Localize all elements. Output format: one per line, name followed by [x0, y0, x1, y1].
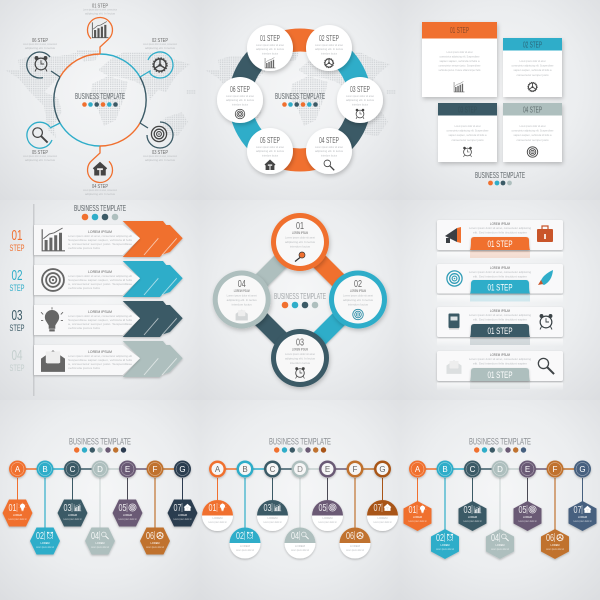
- row 02: vehicula purus felis: [68, 287, 101, 290]
- node C: Lorem ipsum dolor sit: [64, 518, 82, 521]
- panel: step buttons: [437, 220, 563, 390]
- node A: A: [215, 465, 221, 474]
- step 05: [23, 122, 60, 162]
- step 01: [83, 4, 117, 54]
- side rule: [33, 204, 34, 396]
- step circle 05: Lorem ipsum dolor sit amet: [256, 146, 284, 149]
- row 01: a, consectetur semper justo. Suspendisse: [68, 243, 133, 246]
- link line: [417, 468, 582, 470]
- node G: [168, 460, 198, 526]
- step circle 01: interdum luctus: [262, 52, 279, 56]
- step 03: Lorem ipsum dolor sit amet, consectetur: [143, 155, 177, 158]
- step circle 03: adipiscing elit. In lectus: [346, 99, 375, 102]
- node B: LOREM: [40, 542, 50, 545]
- node E: 05: [318, 503, 327, 514]
- link line: [217, 468, 382, 470]
- node D: Lorem ipsum dolor sit: [91, 546, 109, 549]
- heading: [74, 204, 126, 220]
- node E: Lorem ipsum dolor sit: [118, 518, 137, 521]
- panel: timeline circles: [202, 436, 398, 558]
- circle 02: LOREM IPSUM: [350, 289, 366, 293]
- step circle 05: [247, 128, 293, 174]
- node F: LOREM: [150, 542, 160, 545]
- node D: [85, 460, 115, 554]
- row 04: LOREM IPSUM: [88, 350, 112, 354]
- node A: Lorem ipsum dolor sit: [208, 521, 227, 524]
- node A: Lorem ipsum dolor sit: [8, 518, 27, 521]
- step circle 05: interdum luctus: [262, 154, 279, 158]
- row 03: STEP: [10, 323, 24, 333]
- step circle 01: [247, 25, 293, 71]
- circle 04: 04: [238, 279, 246, 290]
- node E: [112, 460, 142, 526]
- card 03: sapien sapien, vehicula id felis a: [448, 134, 487, 137]
- heading: [269, 436, 331, 453]
- node D: D: [297, 465, 303, 474]
- node F: [541, 460, 569, 559]
- step circle 03: 03 STEP: [350, 85, 370, 94]
- step 06: Lorem ipsum dolor sit amet, consectetur: [23, 43, 57, 46]
- row 1: Lorem ipsum dolor sit amet, consectetur adipiscing: [469, 227, 532, 230]
- heading: BUSINESS TEMPLATE: [74, 204, 126, 213]
- step 06: adipiscing elit. In lectus: [25, 47, 56, 50]
- node C: [458, 460, 486, 531]
- panel: six circle ring: [205, 25, 396, 174]
- node G: 07: [374, 503, 382, 514]
- node G: [367, 460, 398, 531]
- circle 03: LOREM IPSUM: [292, 348, 308, 352]
- row 2: elit. Sed interdum felis tincidunt sapien: [473, 276, 528, 278]
- node C: 03: [64, 503, 72, 514]
- heading: [469, 436, 531, 453]
- card 02: 02 STEP: [523, 40, 542, 50]
- step 02: [140, 38, 177, 78]
- panel: timeline hexagons vertical: [404, 436, 596, 559]
- card 01: 01 STEP: [450, 26, 469, 35]
- step 06: 06 STEP: [32, 38, 48, 44]
- node D: 04: [291, 531, 299, 542]
- row 3: Lorem ipsum dolor sit amet, consectetur adipiscing: [469, 314, 532, 317]
- node E: E: [325, 465, 330, 474]
- node G: LOREM: [178, 514, 187, 517]
- node B: 02: [36, 531, 44, 542]
- circle 01: [271, 213, 329, 271]
- row 03: [10, 301, 183, 337]
- step circle 03: interdum luctus: [352, 104, 369, 106]
- node G: Lorem ipsum dolor sit: [374, 521, 392, 524]
- card 04: [503, 103, 562, 162]
- card 02: [503, 38, 562, 97]
- node D: [486, 460, 514, 559]
- node C: Lorem ipsum dolor sit: [464, 520, 482, 523]
- step circle 01: adipiscing elit. In lectus: [256, 48, 285, 51]
- step 04: 04 STEP: [92, 184, 108, 190]
- step circle 02: interdum luctus: [321, 52, 338, 56]
- panel: line circle steps: [5, 4, 196, 196]
- heading: BUSINESS TEMPLATE: [75, 92, 125, 101]
- row 01: Suspendisse sapien sapien, vehicula id felis: [68, 239, 133, 242]
- circle 02: adipiscing elit. In lectus: [343, 299, 374, 302]
- step circle 06: Lorem ipsum dolor sit amet: [226, 95, 254, 98]
- node E: Lorem ipsum dolor sit: [318, 521, 337, 524]
- node A: LOREM: [212, 517, 222, 520]
- node A: [202, 460, 233, 531]
- step circle 02: Lorem ipsum dolor sit amet: [315, 44, 343, 47]
- card 04: sapien sapien, vehicula id felis a: [514, 134, 552, 137]
- row 2: LOREM IPSUM: [490, 266, 510, 270]
- row 2: 01 STEP: [488, 282, 512, 292]
- node B: B: [42, 465, 48, 474]
- panel: timeline hexagons horizontal: [2, 436, 198, 554]
- row 02: a, consectetur semper justo. Suspendisse: [68, 283, 133, 286]
- step circle 02: adipiscing elit. In lectus: [315, 48, 344, 51]
- step 02: Lorem ipsum dolor sit amet, consectetur: [143, 43, 177, 46]
- row 03: vehicula purus felis: [68, 327, 101, 330]
- heading: BUSINESS TEMPLATE: [269, 436, 331, 448]
- node G: LOREM: [578, 516, 587, 519]
- row 04: Lorem ipsum dolor sit amet, consectetur adipiscing elit: [68, 355, 132, 358]
- row 01: STEP: [10, 243, 24, 253]
- node B: Lorem ipsum dolor sit: [236, 549, 254, 552]
- node C: 03: [464, 505, 472, 516]
- card 01: Lorem ipsum dolor sit amet: [446, 51, 473, 54]
- node E: LOREM: [123, 514, 132, 517]
- node B: [30, 460, 60, 554]
- node G: G: [579, 465, 586, 474]
- node C: C: [70, 465, 76, 474]
- step 02: 02 STEP: [152, 38, 168, 44]
- row 03: Suspendisse sapien sapien, vehicula id felis: [68, 319, 133, 322]
- row 04: vehicula purus felis: [68, 367, 101, 370]
- step circle 05: adipiscing elit. In lectus: [256, 150, 285, 153]
- node E: 05: [118, 503, 127, 514]
- connector bars: [242, 242, 358, 358]
- node A: LOREM: [13, 514, 22, 517]
- node G: 07: [174, 503, 182, 514]
- card 02: consectetur semper justo: [516, 74, 549, 77]
- node A: 01: [8, 503, 17, 514]
- node B: 02: [236, 531, 244, 542]
- heading: [75, 92, 125, 107]
- node F: F: [153, 465, 158, 474]
- node D: D: [97, 465, 103, 474]
- node E: 05: [518, 505, 527, 516]
- node F: 06: [346, 531, 354, 542]
- node E: [514, 460, 542, 531]
- node D: Lorem ipsum dolor sit: [291, 549, 309, 552]
- step 01: 01 STEP: [92, 4, 108, 10]
- node G: G: [179, 465, 186, 474]
- node F: Lorem ipsum dolor sit: [346, 549, 364, 552]
- panel: arrow banners: [10, 204, 183, 396]
- row 01: LOREM IPSUM: [88, 230, 112, 234]
- step 05: 05 STEP: [32, 150, 48, 156]
- panel: four cards: [422, 22, 562, 185]
- node B: LOREM: [440, 544, 450, 547]
- node D: LOREM: [496, 544, 504, 547]
- node G: Lorem ipsum dolor sit: [574, 520, 592, 523]
- row 04: Suspendisse sapien sapien, vehicula id felis: [68, 359, 133, 362]
- card 03: consectetur adipiscing elit. Suspendisse: [446, 130, 489, 132]
- row 02: [10, 261, 183, 297]
- circle 04: interdum luctus: [232, 304, 253, 306]
- node C: C: [270, 465, 276, 474]
- card 01: consectetur adipiscing elit. Suspendisse: [440, 56, 480, 58]
- node B: B: [442, 465, 448, 474]
- node A: 01: [408, 505, 417, 516]
- card 04: consectetur adipiscing elit. Suspendisse: [512, 130, 554, 132]
- node E: Lorem ipsum dolor sit: [518, 520, 537, 523]
- circle 04: LOREM IPSUM: [234, 289, 250, 293]
- node F: F: [353, 465, 358, 474]
- row 1: [437, 220, 563, 260]
- circle 02: 02: [354, 279, 362, 290]
- node B: 02: [436, 533, 444, 544]
- row 04: 04: [12, 347, 22, 364]
- step 01: Lorem ipsum dolor sit amet, consectetur: [83, 8, 117, 12]
- row 03: LOREM IPSUM: [88, 310, 112, 314]
- circle 03: adipiscing elit. In lectus: [285, 358, 316, 360]
- row 03: 03: [12, 307, 22, 324]
- node F: [140, 460, 170, 554]
- step circle 02: 02 STEP: [319, 34, 339, 43]
- node F: LOREM: [550, 544, 560, 547]
- card 03: consectetur semper justo: [452, 139, 484, 142]
- step 04: [83, 146, 117, 196]
- step circle 03: [337, 77, 383, 123]
- row 02: Lorem ipsum dolor sit amet, consectetur adipiscing elit: [68, 275, 132, 278]
- node C: [58, 460, 88, 526]
- row 3: [437, 307, 563, 346]
- node A: [404, 460, 432, 531]
- node F: [340, 460, 370, 558]
- step 03: [140, 122, 177, 162]
- node G: G: [379, 465, 386, 474]
- row 3: elit. Sed interdum felis tincidunt sapien: [473, 318, 528, 322]
- node A: Lorem ipsum dolor sit: [408, 520, 427, 523]
- node A: A: [415, 465, 421, 474]
- card 02: Lorem ipsum dolor sit amet: [520, 60, 546, 63]
- row 1: LOREM IPSUM: [490, 222, 510, 226]
- node B: Lorem ipsum dolor sit: [436, 548, 454, 551]
- step circle 03: Lorem ipsum dolor sit amet: [346, 95, 374, 98]
- step circle 02: [306, 25, 352, 71]
- step 05: adipiscing elit. In lectus: [25, 159, 56, 162]
- card 01: sapien sapien, vehicula id felis a: [440, 60, 480, 63]
- panel: diamond of circles: [213, 213, 387, 387]
- step circle 06: [217, 77, 263, 123]
- node B: Lorem ipsum dolor sit: [36, 546, 54, 549]
- node G: [568, 460, 596, 531]
- node B: [230, 460, 260, 558]
- node F: Lorem ipsum dolor sit: [146, 546, 164, 549]
- row 4: Lorem ipsum dolor sit amet, consectetur adipiscing: [469, 358, 532, 361]
- step circle 04: adipiscing elit. In lectus: [315, 150, 344, 153]
- node B: [431, 460, 459, 559]
- step circle 06: 06 STEP: [230, 85, 250, 94]
- heading: BUSINESS TEMPLATE: [274, 292, 326, 301]
- node D: LOREM: [295, 545, 305, 548]
- node F: 06: [146, 531, 154, 542]
- step circle 01: 01 STEP: [260, 34, 280, 43]
- heading: [475, 171, 525, 185]
- ring segments: [240, 40, 360, 160]
- step 04: Lorem ipsum dolor sit amet, consectetur: [83, 189, 117, 192]
- node C: LOREM: [268, 517, 278, 520]
- heading: BUSINESS TEMPLATE: [69, 436, 131, 448]
- node G: 07: [574, 505, 582, 516]
- row 01: 01: [12, 227, 22, 244]
- row 04: a, consectetur semper justo. Suspendisse: [68, 363, 133, 366]
- row 02: 02: [12, 267, 22, 284]
- row 2: Lorem ipsum dolor sit amet, consectetur adipiscing: [469, 271, 532, 274]
- row 03: Lorem ipsum dolor sit amet, consectetur adipiscing elit: [68, 315, 132, 318]
- circle 02: Lorem ipsum dolor sit amet: [343, 294, 373, 298]
- step circle 04: [306, 128, 352, 174]
- row 01: [10, 221, 183, 257]
- row 4: 01 STEP: [488, 370, 512, 380]
- step circle 06: adipiscing elit. In lectus: [226, 99, 255, 102]
- node B: B: [242, 465, 248, 474]
- card 03: [438, 103, 497, 162]
- big segmented ring: [54, 54, 146, 146]
- circle 03: [271, 329, 329, 387]
- heading: BUSINESS TEMPLATE: [475, 171, 525, 180]
- step 03: 03 STEP: [152, 150, 168, 156]
- node F: LOREM: [350, 545, 360, 548]
- row 02: STEP: [10, 283, 24, 293]
- row 01: Lorem ipsum dolor sit amet, consectetur adipiscing elit: [68, 235, 132, 238]
- row 1: elit. Sed interdum felis tincidunt sapien: [473, 232, 528, 234]
- card 03: Lorem ipsum dolor sit amet: [454, 125, 481, 128]
- node F: F: [553, 465, 558, 474]
- step 05: Lorem ipsum dolor sit amet, consectetur: [23, 155, 57, 158]
- circle 01: adipiscing elit. In lectus: [285, 241, 316, 244]
- step circle 04: interdum luctus: [321, 154, 338, 158]
- node C: LOREM: [468, 516, 477, 519]
- circle 04: adipiscing elit. In lectus: [227, 299, 258, 302]
- node F: 06: [546, 533, 554, 544]
- step circle 05: 05 STEP: [260, 136, 280, 145]
- heading: [274, 292, 326, 308]
- row 04: [10, 341, 183, 377]
- node A: [2, 460, 32, 526]
- step circle 04: Lorem ipsum dolor sit amet: [315, 146, 343, 149]
- node D: Lorem ipsum dolor sit: [491, 548, 509, 551]
- row 3: 01 STEP: [488, 326, 512, 336]
- node C: LOREM: [68, 514, 77, 517]
- node C: 03: [264, 503, 272, 514]
- node E: E: [125, 465, 130, 474]
- node A: LOREM: [413, 516, 422, 519]
- node A: A: [15, 465, 21, 474]
- row 1: 01 STEP: [488, 239, 512, 249]
- circle 03: interdum luctus: [290, 362, 311, 365]
- node E: E: [525, 465, 530, 474]
- circle 01: Lorem ipsum dolor sit amet: [285, 236, 315, 240]
- node F: Lorem ipsum dolor sit: [546, 548, 564, 551]
- circle 02: [329, 270, 387, 328]
- node G: Lorem ipsum dolor sit: [174, 518, 192, 521]
- node E: LOREM: [523, 516, 532, 519]
- card 04: 04 STEP: [523, 106, 542, 114]
- node C: Lorem ipsum dolor sit: [264, 521, 282, 524]
- node B: LOREM: [240, 545, 250, 548]
- heading: BUSINESS TEMPLATE: [275, 92, 325, 101]
- card 04: consectetur semper justo: [516, 139, 549, 142]
- row 04: STEP: [10, 363, 24, 373]
- step 02: adipiscing elit. In lectus: [145, 47, 176, 50]
- circle 04: [213, 270, 271, 328]
- circle 01: interdum luctus: [290, 246, 311, 248]
- node C: [257, 460, 288, 531]
- node D: LOREM: [96, 542, 104, 545]
- link line: [17, 468, 182, 470]
- row 02: LOREM IPSUM: [88, 270, 112, 274]
- step 03: adipiscing elit. In lectus: [145, 159, 176, 162]
- node D: [284, 460, 316, 558]
- circle 01: 01: [296, 221, 304, 232]
- circle 01: LOREM IPSUM: [292, 231, 308, 235]
- card 01: vehicula purus. Fusce ullamcorper felis: [438, 69, 481, 72]
- node E: [312, 460, 343, 531]
- row 4: LOREM IPSUM: [490, 353, 510, 357]
- step circle 01: Lorem ipsum dolor sit amet: [256, 44, 284, 47]
- row 2: [437, 264, 563, 303]
- card 01: consectetur semper justo. Suspendisse: [438, 64, 481, 68]
- node E: LOREM: [322, 517, 332, 520]
- card 01: [422, 22, 497, 97]
- node G: LOREM: [378, 517, 388, 520]
- step 01: adipiscing elit. In lectus: [85, 12, 116, 16]
- node C: C: [470, 465, 476, 474]
- row 3: LOREM IPSUM: [490, 309, 510, 313]
- card 02: sapien sapien, vehicula id felis a: [514, 69, 552, 72]
- step 04: adipiscing elit. In lectus: [85, 193, 116, 196]
- row 02: Suspendisse sapien sapien, vehicula id felis: [68, 279, 133, 282]
- circle 02: interdum luctus: [348, 304, 369, 306]
- card 02: consectetur adipiscing elit. Suspendisse: [512, 64, 554, 68]
- row 4: elit. Sed interdum felis tincidunt sapien: [473, 362, 528, 366]
- circle 03: 03: [296, 338, 304, 348]
- node D: 04: [491, 533, 499, 544]
- node D: 04: [91, 531, 99, 542]
- heading: [275, 92, 325, 107]
- circle 04: Lorem ipsum dolor sit amet: [227, 294, 257, 298]
- row 4: [437, 351, 563, 390]
- card 03: 03 STEP: [458, 106, 477, 114]
- step circle 04: 04 STEP: [319, 136, 339, 145]
- circle 03: Lorem ipsum dolor sit amet: [285, 353, 315, 356]
- step circle 06: interdum luctus: [232, 104, 249, 106]
- node D: D: [497, 465, 503, 474]
- heading: BUSINESS TEMPLATE: [469, 436, 531, 448]
- heading: [69, 436, 131, 453]
- row 01: vehicula purus felis: [68, 247, 101, 250]
- row 03: a, consectetur semper justo. Suspendisse: [68, 323, 133, 326]
- node A: 01: [208, 503, 217, 514]
- step 06: [23, 38, 60, 78]
- card 04: Lorem ipsum dolor sit amet: [520, 125, 546, 128]
